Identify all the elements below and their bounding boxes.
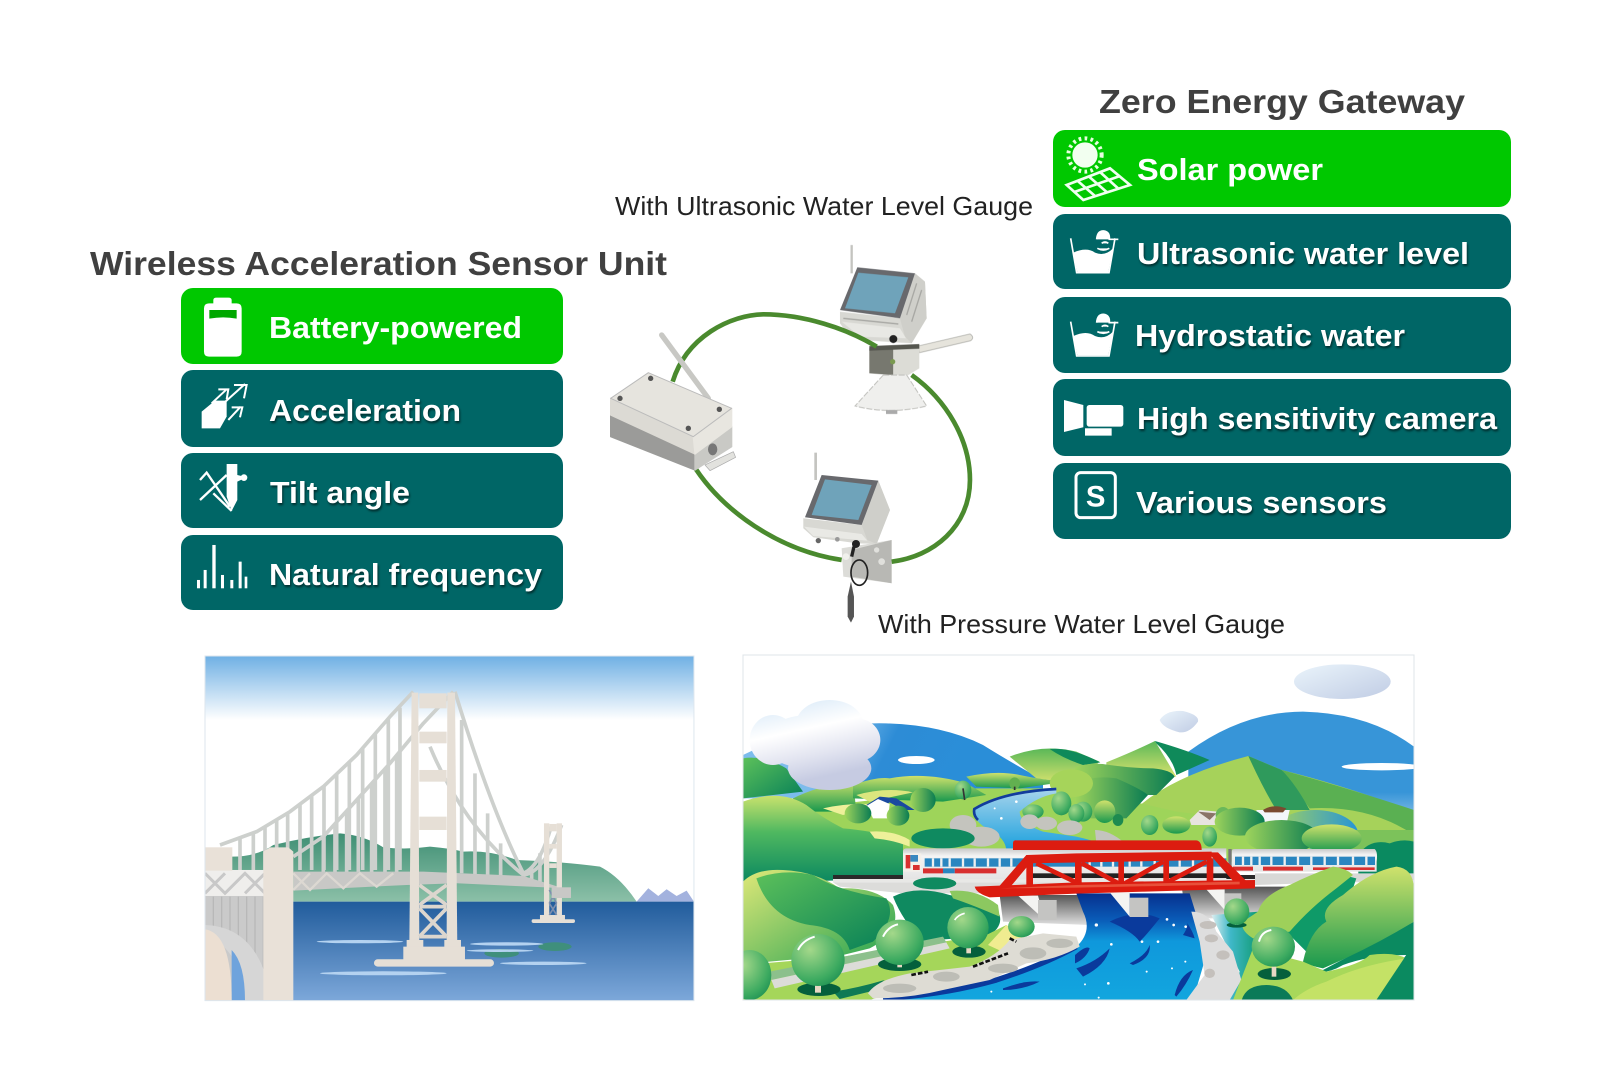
heading: Wireless Acceleration Sensor Unit: Wireless Acceleration Sensor Unit [90, 245, 667, 282]
shade below bridge [1000, 895, 1090, 925]
card: high sensitivity camera [1053, 379, 1511, 456]
central clumps [1075, 764, 1175, 795]
card: battery-powered [181, 288, 563, 364]
right village [1190, 810, 1216, 825]
device: ultrasonic gateway [840, 245, 973, 414]
card: acceleration: Acceleration [269, 393, 461, 428]
hills above train right [1245, 820, 1312, 849]
far tower [532, 823, 575, 923]
card: hydrostatic water [1053, 297, 1511, 373]
card: ultrasonic water level: Ultrasonic water level [1137, 236, 1469, 271]
icon: camera [1064, 400, 1123, 436]
icon: sun and solar panel [1067, 138, 1130, 200]
icon: frequency bars [197, 545, 247, 588]
card: various sensors [1053, 463, 1511, 539]
piers [1018, 896, 1040, 914]
card: tilt angle: Tilt angle [270, 475, 410, 510]
big right mountain [1128, 756, 1414, 862]
big cloud [750, 700, 880, 790]
arc: wireless links [673, 314, 970, 562]
icon: S sensor [1076, 473, 1115, 518]
heading: Zero Energy Gateway: Zero Energy Gateway [1099, 83, 1466, 120]
track [833, 875, 1255, 879]
islands and water streaks [484, 949, 519, 958]
card: natural frequency: Natural frequency [269, 557, 543, 592]
illustration: suspension bridge [205, 656, 694, 1001]
icon: tilt [200, 464, 247, 511]
distant mountains [743, 723, 1043, 798]
left village [866, 797, 915, 810]
caption: ultrasonic gauge: With Ultrasonic Water Level Gauge [615, 191, 1033, 221]
main tower [374, 693, 494, 967]
mid ground [800, 788, 1310, 862]
illustration: river valley with train on red bridge [728, 655, 1422, 1000]
foreground left hills [743, 870, 895, 965]
anchorage [206, 896, 264, 1000]
card: solar power: Solar power [1137, 152, 1323, 187]
red truss bridge [998, 840, 1246, 888]
card: high sensitivity camera: High sensitivity camera [1137, 401, 1498, 436]
diagram: wireless network of devices [611, 245, 973, 623]
card: various sensors: Various sensors [1136, 485, 1387, 520]
caption: pressure gauge: With Pressure Water Level Gauge [878, 609, 1285, 639]
lake hill [1288, 810, 1358, 849]
device: pressure gateway [803, 453, 892, 623]
panel: sensor unit features [181, 288, 563, 610]
lower river [883, 893, 1206, 1000]
train [903, 848, 1377, 879]
foreground ground and path [743, 925, 1026, 1000]
icon: hydrostatic water tank [1071, 314, 1118, 356]
icon: S sensor: S [1086, 481, 1105, 514]
icon: acceleration arrows [202, 384, 247, 428]
card: battery-powered: Battery-powered [269, 310, 522, 345]
card: tilt angle [181, 453, 563, 528]
foreground trees [728, 898, 1295, 1000]
big left hill [743, 796, 903, 883]
card: solar power [1053, 130, 1511, 207]
card: natural frequency [181, 535, 563, 610]
right river bank [1211, 912, 1260, 1000]
icon: battery [204, 298, 242, 357]
panel: gateway features [1053, 130, 1511, 539]
upper river [973, 788, 1091, 848]
card: acceleration [181, 370, 563, 447]
rocks upper [950, 814, 1125, 847]
card: hydrostatic water: Hydrostatic water [1135, 318, 1405, 353]
foreground right hills [1286, 875, 1356, 952]
icon: ultrasonic water tank [1071, 231, 1118, 273]
foreground left rocks [868, 933, 1080, 998]
card: ultrasonic water level [1053, 214, 1511, 289]
device: sensor unit box [611, 335, 736, 471]
